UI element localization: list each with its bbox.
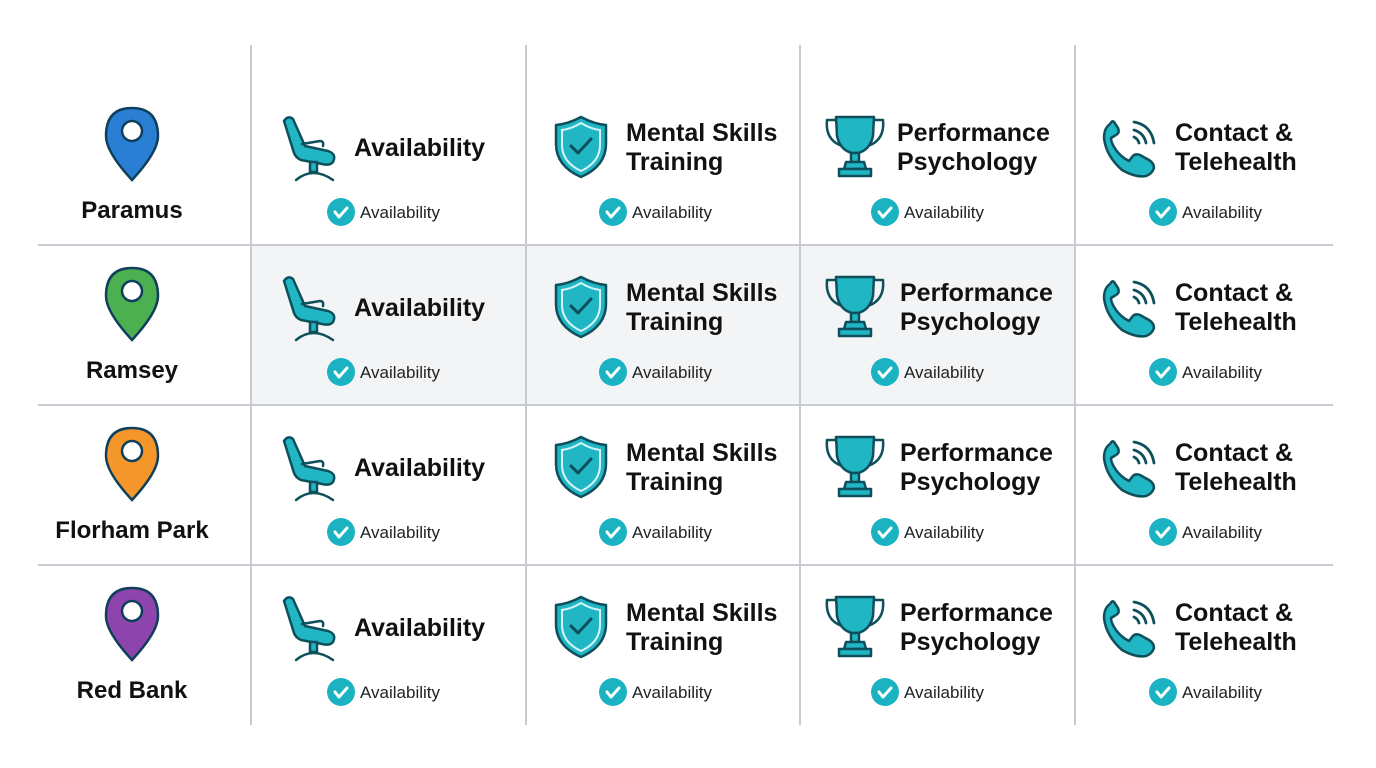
cell: mental skills training: Training (626, 628, 723, 656)
cell: mental skills training: Mental Skills (626, 439, 777, 467)
cell: performance psychology: Psychology (900, 468, 1040, 496)
cell: performance psychology (827, 597, 1053, 706)
cell: contact & telehealth (1104, 439, 1297, 546)
cell: mental skills training (556, 277, 777, 386)
cell: performance psychology: Availability (904, 203, 985, 222)
cell: performance psychology: Availability (904, 523, 985, 542)
cell: mental skills training: Mental Skills (626, 599, 777, 627)
cell: availability (284, 437, 485, 546)
cell: mental skills training (556, 597, 777, 706)
cell: contact & telehealth: Telehealth (1175, 468, 1297, 496)
cell: contact & telehealth: Availability (1182, 203, 1263, 222)
cell: contact & telehealth: Availability (1182, 523, 1263, 542)
cell: mental skills training: Availability (632, 203, 713, 222)
cell: contact & telehealth: Availability (1182, 683, 1263, 702)
location name: Paramus (81, 197, 183, 224)
cell: availability: Availability (360, 203, 441, 222)
location name: Ramsey (86, 357, 179, 384)
cell: mental skills training: Training (626, 468, 723, 496)
cell: mental skills training: Mental Skills (626, 279, 777, 307)
cell: availability: Availability (354, 614, 485, 642)
cell: mental skills training: Training (626, 308, 723, 336)
icon: orange location pin (106, 428, 158, 500)
cell: performance psychology: Psychology (900, 628, 1040, 656)
cell: availability: Availability (354, 294, 485, 322)
highlighted background: Ramsey row (251, 245, 1075, 405)
cell: mental skills training (556, 437, 777, 546)
cell: availability: Availability (354, 134, 485, 162)
cell: availability: Availability (354, 454, 485, 482)
location name: Red Bank (77, 677, 188, 704)
cell: availability: Availability (360, 363, 441, 382)
cell: contact & telehealth (1104, 279, 1297, 386)
cell: availability (284, 597, 485, 706)
cell: performance psychology (827, 117, 1050, 226)
row: Red Bank (77, 588, 1297, 706)
cell: contact & telehealth (1104, 599, 1297, 706)
cell: contact & telehealth: Telehealth (1175, 148, 1297, 176)
location name: Florham Park (55, 517, 209, 544)
cell: availability (284, 277, 485, 386)
cell: availability: Availability (360, 523, 441, 542)
cell: mental skills training: Availability (632, 683, 713, 702)
cell: availability: Availability (360, 683, 441, 702)
row: Florham Park (55, 428, 1297, 546)
cell: availability (284, 117, 485, 226)
cell: mental skills training: Mental Skills (626, 119, 777, 147)
cell: contact & telehealth: Contact & (1175, 119, 1293, 147)
icon: blue location pin (106, 108, 158, 180)
cell: contact & telehealth: Contact & (1175, 439, 1293, 467)
cell: contact & telehealth (1104, 119, 1297, 226)
row: Ramsey (86, 268, 1297, 386)
cell: performance psychology: Performance (900, 279, 1053, 307)
cell: performance psychology (827, 437, 1053, 546)
icon: purple location pin (106, 588, 158, 660)
icon: green location pin (106, 268, 158, 340)
cell: mental skills training: Training (626, 148, 723, 176)
cell: contact & telehealth: Contact & (1175, 599, 1293, 627)
cell: contact & telehealth: Telehealth (1175, 308, 1297, 336)
cell: performance psychology (827, 277, 1053, 386)
cell: performance psychology: Psychology (900, 308, 1040, 336)
row: Paramus (81, 108, 1297, 226)
cell: contact & telehealth: Telehealth (1175, 628, 1297, 656)
cell: contact & telehealth: Availability (1182, 363, 1263, 382)
cell: mental skills training (556, 117, 777, 226)
cell: performance psychology: Psychology (897, 148, 1037, 176)
cell: performance psychology: Availability (904, 683, 985, 702)
cell: mental skills training: Availability (632, 363, 713, 382)
cell: mental skills training: Availability (632, 523, 713, 542)
cell: performance psychology: Availability (904, 363, 985, 382)
cell: contact & telehealth: Contact & (1175, 279, 1293, 307)
cell: performance psychology: Performance (900, 439, 1053, 467)
cell: performance psychology: Performance (900, 599, 1053, 627)
cell: performance psychology: Performance (897, 119, 1050, 147)
